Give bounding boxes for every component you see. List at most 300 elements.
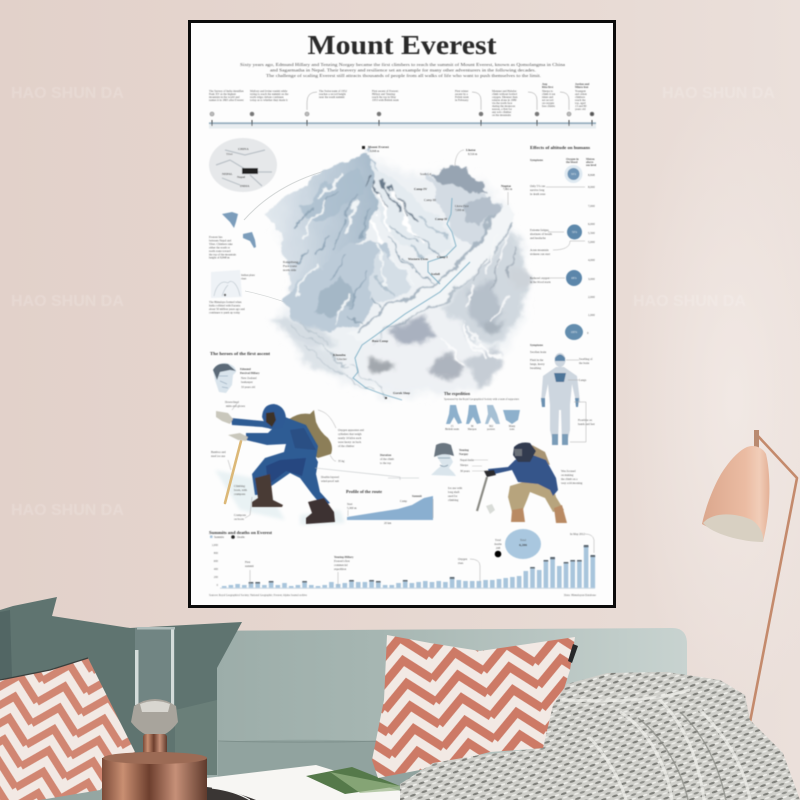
pants [508, 480, 564, 512]
body label: the brain [579, 361, 590, 365]
tectonic sketch: rises [241, 276, 247, 280]
chart annotations: Tenzing-Hillary [334, 555, 354, 559]
large climber annotations: Climbing [234, 484, 245, 488]
body label: Swollen brain [530, 350, 547, 354]
large climber annotations: to the top [380, 461, 391, 465]
rock streaks [294, 176, 444, 331]
large climber annotations: Oxygen apparatus and [338, 428, 364, 432]
small climber annotations: Ice axe with [448, 486, 463, 490]
watermarks: HAO SHUN DA [662, 85, 775, 102]
profile labels: Summit [412, 494, 422, 498]
y axis labels: 800 [214, 552, 219, 555]
death markers [249, 545, 595, 584]
intro text: Sixty years ago, Edmund Hillary and Tenzing Norgay became the first climbers to reach the summit of Mount Everest, known as Qomolangma in China [240, 62, 565, 68]
timeline captions: any solo climber [492, 110, 511, 114]
route note: height of 8,848 m [209, 256, 230, 260]
Hillary text: Edmund [240, 367, 251, 371]
altitude bubbles: 100% [571, 331, 578, 334]
y axis labels: 400 [214, 568, 219, 571]
altitude notes: Acute mountain [530, 248, 549, 252]
body label: Lungs [579, 378, 587, 382]
main massif [264, 153, 411, 331]
snow patches [215, 470, 345, 525]
route note: Everest lies [209, 235, 223, 239]
timeline captions: today as to whether they made it [250, 98, 288, 102]
profile labels: 20 km [384, 521, 392, 525]
intro text [240, 62, 565, 78]
body label: Swelling of [579, 357, 592, 361]
total deaths marker: 248 [496, 546, 501, 550]
tectonic sketch [211, 270, 255, 298]
altitude bubbles: 34% [571, 173, 577, 176]
timeline captions: oxygen. Messner then [492, 95, 518, 99]
chart annotations [245, 532, 594, 586]
timeline captions: reach the [575, 98, 586, 102]
large climber annotations: cylinders that weigh [338, 432, 362, 436]
mountain illustration [264, 145, 530, 400]
Tenzing text: Norgay [459, 452, 469, 456]
altitude column heads: Oxygen in [566, 157, 579, 161]
timeline captions: Polish team [455, 95, 469, 99]
timeline captions: climb it ten [542, 92, 556, 96]
small climber annotations: climbing [448, 498, 459, 502]
timeline captions: The Survey of India identifies [209, 89, 245, 93]
large climber annotations: were heavy on back [338, 440, 362, 444]
tectonic sketch: Indian plate [241, 273, 255, 277]
climbing route [353, 198, 470, 400]
expedition panel [444, 392, 520, 431]
chart heading: Summits and deaths on Everest [209, 531, 273, 535]
total summits circle: Total [520, 538, 526, 542]
boots [252, 474, 283, 507]
pack [532, 445, 550, 465]
route note: Tibet. Climbers take [209, 242, 233, 246]
locator map: CHINA [238, 147, 249, 151]
tectonic text: India collided with Eurasia [209, 304, 241, 308]
timeline captions: in February [455, 98, 469, 102]
timeline captions: trying to reach the summit on the [250, 92, 289, 96]
expedition labels: 15 [451, 425, 454, 428]
expedition labels: Sherpas [468, 428, 476, 431]
body label: breathing [530, 366, 541, 370]
chart annotations: Everest's first [334, 559, 350, 563]
expedition labels: 36 [471, 425, 474, 428]
timeline [209, 82, 596, 129]
large climber annotations: wind-proof suit [321, 479, 339, 483]
sketch leader line [245, 291, 362, 340]
watermarks: HAO SHUN DA [11, 293, 124, 310]
Tenzing text: Sherpa [460, 463, 469, 467]
y axis labels: 600 [214, 560, 219, 563]
jacket [488, 454, 558, 496]
timeline captions: during the monsoon [492, 104, 516, 108]
axe [477, 477, 487, 511]
chart source right: Data: Himalayan Database [564, 594, 597, 597]
expedition labels [445, 425, 516, 431]
mountain labels: Camp III [424, 198, 436, 202]
body label: Fluid in the [530, 358, 544, 362]
expedition labels: porters [487, 428, 495, 431]
dark cushion [0, 597, 242, 775]
chart source left: Sources: Royal Geographical Society; National Geographic; Everest; Alpine Journal archive [209, 594, 308, 597]
small climber annotations: very cold morning [561, 481, 583, 485]
mountain labels: Camp I [437, 255, 448, 259]
timeline captions: Youngest [575, 89, 586, 93]
timeline captions: returns alone in 1980 [492, 98, 517, 102]
chart legend: Deaths [237, 536, 245, 539]
total summits circle [505, 529, 541, 559]
altitude notes: and headache [530, 236, 546, 240]
timeline captions: Ang [542, 82, 548, 86]
Tenzing text [459, 448, 488, 473]
altitude notes [530, 184, 552, 284]
small climber annotations: Was focused [561, 469, 576, 473]
body label [530, 343, 595, 426]
large climber annotations: nearly 14 kilos each [338, 436, 362, 440]
mountain labels [283, 145, 513, 399]
floor lamp [702, 430, 797, 722]
altitude bubbles: 68% [571, 277, 577, 280]
timeline captions: set record [542, 98, 554, 102]
Hillary portrait [213, 363, 236, 393]
Hillary text: 33 years old [241, 385, 256, 389]
mountain labels: South Col [420, 173, 431, 176]
mountain labels: Western Cwm [408, 257, 428, 261]
total summits circle: 6,206 [519, 543, 527, 547]
intro text: The challenge of scaling Everest still attracts thousands of people from all walks of life who want to push themselves to the limit. [266, 73, 541, 78]
locator map: NEPAL [222, 172, 233, 176]
mountain labels: Face route [283, 264, 297, 268]
gloves [216, 411, 233, 424]
timeline captions: years old [575, 107, 586, 111]
watermarks: HAO SHUN DA [11, 85, 124, 102]
hood [513, 442, 536, 462]
open book [207, 765, 430, 800]
timeline captions: times and [542, 95, 554, 99]
diagonal glacier [346, 204, 516, 342]
altitude scale: 5,000 [588, 240, 595, 245]
human figure [541, 353, 580, 445]
expedition labels: Many [509, 425, 516, 428]
hood [262, 404, 286, 429]
Tenzing portrait [431, 443, 456, 476]
total deaths marker: Total [495, 538, 501, 542]
altitude scale: 3,000 [588, 277, 595, 282]
mountain labels: Glacier [337, 357, 348, 361]
Hillary text: beekeeper [241, 380, 253, 384]
lower ridges [291, 321, 501, 394]
altitude scale: 8,000 [588, 185, 595, 190]
large climber annotations: of the climb [380, 457, 395, 461]
snow [486, 504, 495, 514]
watermarks [11, 85, 775, 519]
knit blanket [400, 672, 800, 800]
chart legend [210, 535, 245, 539]
timeline connectors [307, 92, 569, 110]
right lower massif [444, 232, 530, 346]
total deaths marker: deaths [494, 542, 503, 546]
altitude bubbles: 50% [572, 231, 578, 234]
altitude column heads: above [586, 160, 594, 164]
mountain labels: Khumbu [333, 353, 346, 357]
mountain base haze [276, 156, 524, 398]
chart annotations: summit [245, 564, 254, 568]
timeline captions: Miura feat [575, 85, 588, 89]
altitude scale [587, 173, 595, 335]
large climber [215, 404, 345, 525]
altitude notes: in death zone [530, 192, 546, 196]
timeline captions: reaches a record height [319, 92, 346, 96]
route note: between Nepal and [209, 238, 232, 242]
altitude scale: 0 [587, 331, 589, 335]
human body diagram [530, 343, 595, 445]
y axis labels: 0 [217, 584, 219, 587]
timeline captions: on oxygen [542, 101, 555, 105]
chart annotations: Oxygen [458, 557, 468, 561]
timeline captions: Mallory and Irvine vanish while [250, 89, 288, 93]
timeline captions: via the north face [492, 101, 513, 105]
timeline captions: on the mountain [492, 113, 511, 117]
body label: lungs, heavy [530, 362, 545, 366]
altitude scale: 4,000 [588, 258, 595, 263]
altitude column heads: Symptoms [530, 158, 544, 162]
profile labels: 5,300 m [347, 506, 357, 510]
altitude heading: Effects of altitude on humans [530, 145, 590, 150]
timeline captions: mountain in the world and [209, 95, 240, 99]
altitude notes: Only 5% can [530, 184, 546, 188]
tectonic text: continues to push up today [209, 310, 241, 314]
route note: the top of the mountain [209, 252, 237, 256]
locator arc line [244, 164, 362, 220]
glass vase [135, 627, 175, 706]
expedition labels: British team [445, 428, 460, 431]
altitude scale: 5,500 [588, 231, 595, 236]
altitude column heads: sea level [586, 163, 596, 167]
copper candle holder [102, 699, 207, 800]
figure body [216, 404, 335, 524]
large climber annotations: crampons [234, 492, 246, 496]
locator map [209, 138, 277, 192]
mountain labels: Lhotse Face [455, 205, 469, 208]
expedition icons [446, 405, 520, 424]
mountain labels: 7,861 m [503, 188, 513, 191]
locator map: Tibet [226, 152, 233, 156]
altitude notes: in the blood starts [530, 280, 552, 284]
timeline captions: climb without bottled [492, 92, 517, 96]
timeline captions: climbers [575, 95, 586, 99]
chart annotations: expedition [334, 567, 347, 571]
altitude notes: shortness of breath [530, 232, 552, 236]
large climber annotations: steel ice axe [211, 454, 226, 458]
large climber annotations: boots, with [234, 488, 247, 492]
y axis labels: 1,000 [212, 544, 219, 547]
mountain labels: Icefall [431, 272, 440, 276]
profile heading: Profile of the route [346, 490, 382, 494]
small climber annotations: on making [561, 473, 574, 477]
large climber annotations: on boots [234, 517, 245, 521]
timeline captions: reach the top in May [372, 95, 396, 99]
total deaths marker [494, 538, 503, 557]
left chevron pillow [0, 658, 135, 800]
mountain labels: Camp II [435, 217, 448, 221]
timeline captions: names it in 1865 after Everest [209, 98, 244, 102]
timeline captions: 1953 with British team [372, 98, 399, 102]
Hillary text: New Zealand [241, 376, 257, 380]
mountain labels: 8,516 m [468, 153, 478, 156]
altitude column heads: Metres [586, 157, 595, 161]
Tenzing text: Tenzing [459, 448, 469, 452]
timeline captions: north ridge; debate continues [250, 95, 285, 99]
title: Mount Everest [308, 29, 497, 60]
timeline captions: top, aged [575, 101, 586, 105]
ice axe [225, 441, 241, 503]
y axis labels: 200 [214, 576, 219, 579]
timeline captions: ascent by a [455, 92, 469, 96]
Hillary text: Percival Hillary [240, 371, 260, 375]
route note [209, 235, 237, 260]
altitude notes: Extreme fatigue, [530, 228, 550, 232]
right massif ridges [464, 236, 516, 341]
timeline captions: 13 and 80 [575, 104, 587, 108]
profile labels: Camp [400, 499, 407, 503]
lower valley terrain [272, 306, 502, 392]
mountain labels: Gorak Shep [393, 391, 410, 395]
timeline captions [209, 82, 590, 117]
tectonic text: The Himalaya formed when [209, 300, 242, 304]
chart annotations: First [245, 560, 250, 564]
expedition subhead: Sponsored by the Royal Geographical Society with a team of supporters [444, 397, 520, 401]
profile labels: Start [347, 502, 353, 506]
mountain labels: Mount Everest [368, 145, 390, 149]
large climber annotations: Crampons [234, 513, 247, 517]
timeline captions: season, a first for [492, 107, 512, 111]
timeline captions: free climbs [542, 104, 556, 108]
chart annotations: In May 2012 [570, 532, 585, 536]
altitude scale: 2,000 [588, 295, 595, 300]
mountain labels: 7,000 m [455, 209, 465, 212]
tectonic text [209, 300, 245, 314]
profile chart [347, 496, 433, 520]
Tenzing text: 39 years [460, 469, 471, 473]
Hillary text [240, 367, 260, 389]
upper right slopes [372, 161, 503, 258]
altitude scale: 6,000 [588, 222, 595, 227]
altitude bubbles [564, 165, 583, 340]
timeline axis [209, 120, 596, 129]
chart legend: Summits [214, 536, 224, 539]
timeline captions: Messner and Habeler [492, 89, 517, 93]
timeline captions: near the south summit [319, 95, 345, 99]
mountain labels: Nuptse [501, 184, 511, 188]
poster frame [188, 20, 616, 608]
altitude notes: survive long [530, 188, 545, 192]
backpack [288, 410, 332, 458]
expedition heading: The expedition [444, 392, 471, 396]
timeline captions: Peak XV as the highest [209, 92, 236, 96]
timeline markers [210, 112, 594, 116]
tectonic text: about 50 million years ago and [209, 307, 245, 311]
chart baseline [220, 588, 595, 589]
locator map: INDIA [240, 184, 250, 188]
mountain terrain [264, 153, 530, 398]
altitude column heads [530, 157, 596, 167]
large climber annotations [211, 400, 419, 521]
lamp stand [750, 435, 797, 722]
boots [511, 508, 525, 522]
timeline captions: Sherpa to [542, 89, 554, 93]
intro text: and Sagarmatha in Nepal. Their bravery and resilience set an example for many other adventurers in the following decades. [270, 68, 536, 73]
route note: either the south or [209, 246, 230, 250]
glove [484, 470, 496, 477]
timeline captions: Hillary and Tenzing [372, 92, 396, 96]
route profile [346, 490, 433, 525]
y axis labels [212, 544, 219, 587]
timeline captions: Jordan and [575, 82, 590, 86]
timeline captions: First ascent of Everest: [372, 89, 399, 93]
altitude effects panel [530, 145, 596, 340]
mountain labels: north side [283, 268, 297, 272]
timeline captions: First winter [455, 89, 468, 93]
Tenzing text: Nepal-India [460, 458, 475, 462]
altitude notes: sickness can start [530, 252, 550, 256]
timeline captions: The Swiss team of 1952 [319, 89, 347, 93]
timeline captions: and oldest [575, 92, 587, 96]
first ascent heading: The heroes of the first ascent [210, 351, 271, 356]
body brackets [566, 360, 586, 442]
small climber annotations: the climb on a [561, 477, 578, 481]
chart annotations: rises [458, 561, 464, 565]
large climber annotations: Duration [380, 453, 392, 457]
route note: north route toward [209, 249, 231, 253]
mountain labels: Kangshung [283, 260, 298, 264]
Nepal map icons [222, 212, 256, 248]
large climber annotations: mitts and gloves [226, 404, 246, 408]
watermarks: HAO SHUN DA [11, 502, 124, 519]
expedition labels: tons [510, 428, 514, 431]
poster page [191, 23, 613, 605]
small climber annotations [448, 469, 583, 502]
timeline captions: Rita first [542, 85, 553, 89]
mountain labels: 8,848 m [370, 150, 380, 153]
altitude scale: 1,000 [588, 313, 595, 318]
body label: hands and feet [578, 422, 595, 426]
small climber [477, 442, 567, 523]
pillow tag [568, 644, 578, 663]
chart annotations: commercial [334, 563, 348, 567]
altitude scale: 7,000 [588, 204, 595, 209]
large climber annotations: 35 kg [338, 459, 345, 463]
altitude scale: 8,848 [588, 173, 595, 178]
summit bars [222, 546, 595, 588]
expedition labels: 362 [489, 425, 494, 428]
profile labels [347, 494, 433, 525]
sofa [0, 628, 687, 800]
small climber annotations: used for [448, 494, 457, 498]
bar chart panel [209, 529, 597, 597]
lamp shade [702, 430, 769, 542]
centre chevron pillow [372, 635, 578, 778]
locator map: Nepal [237, 175, 245, 179]
altitude column heads: the blood [566, 160, 578, 164]
watermarks: HAO SHUN DA [633, 293, 746, 310]
mountain labels: Lhotse [466, 148, 476, 152]
body label: Symptoms [530, 343, 544, 347]
large climber annotations: Double-layered [321, 475, 340, 479]
body label: Frostbite on [578, 418, 592, 422]
large climber annotations: of the climber [338, 444, 354, 448]
large climber annotations: Bamboo and [211, 450, 226, 454]
mountain labels: Camp IV [414, 187, 428, 191]
